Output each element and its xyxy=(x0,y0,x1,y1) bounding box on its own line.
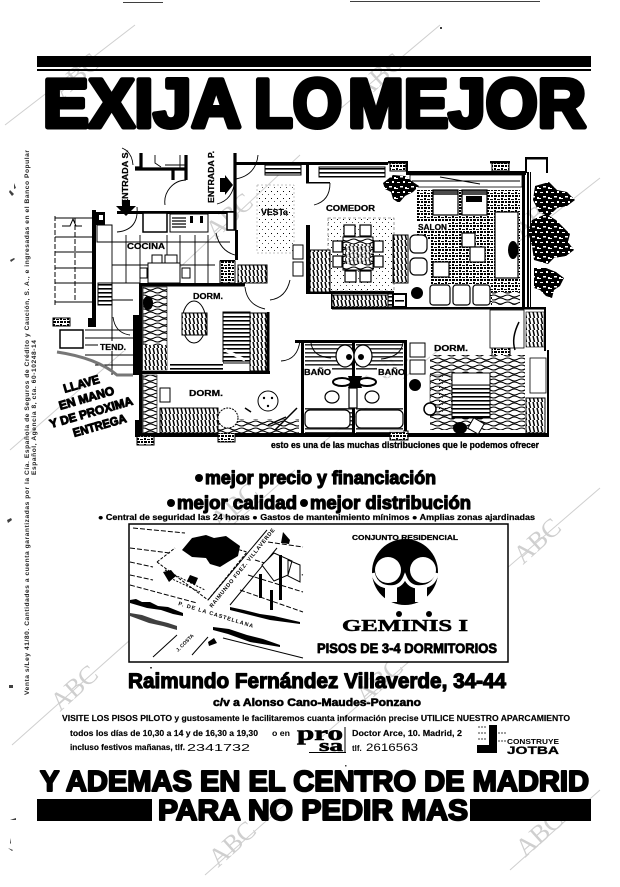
ABC watermarks: ABC xyxy=(507,187,566,244)
opening hours: incluso festivos mañanas, tlf. xyxy=(70,743,185,752)
prosa address xyxy=(352,728,462,754)
benefits heading: mejor distribución xyxy=(310,492,471,513)
windows and wall units xyxy=(53,163,522,445)
callout: llave en mano: EN MANO xyxy=(57,384,116,413)
legal text sidebar: Venta s/Ley 41/80. Cantidades a cuenta garantizadas por la Cía. Española de Seguros de Crédito y Caución, S. A., e ingresadas en el Banco Popular xyxy=(24,150,31,695)
ABC watermarks: ABC xyxy=(508,512,567,569)
bathrooms xyxy=(281,340,405,433)
entrance walls xyxy=(135,153,235,230)
label: COMEDOR: COMEDOR xyxy=(326,204,375,213)
name: Geminis I: GEMINIS I xyxy=(342,616,469,635)
logo: prosa: sa xyxy=(319,736,344,755)
panel: map and logo xyxy=(129,524,508,662)
label: DORM.: DORM. xyxy=(189,389,223,398)
benefits heading xyxy=(167,467,471,513)
exterior walls xyxy=(88,157,549,437)
stairs and kitchen area xyxy=(55,210,235,330)
ABC watermarks: ABC xyxy=(47,47,106,104)
location map: P. DE LA CASTELLANA xyxy=(177,601,254,630)
icon: Geminis logo xyxy=(372,539,438,605)
name: Geminis I xyxy=(342,611,469,635)
ABC watermarks: ABC xyxy=(350,652,409,709)
label: BAÑO right: BAÑO xyxy=(378,368,405,377)
opening hours: 2341732 xyxy=(187,742,250,754)
prosa address: Doctor Arce, 10. Madrid, 2 xyxy=(352,728,462,738)
title xyxy=(43,65,586,142)
title: EXIJA xyxy=(43,65,241,142)
location map xyxy=(130,528,303,658)
legal text sidebar: Español, Agencia 8, cta. 60-10248-14 xyxy=(31,340,38,475)
callout: llave en mano: ENTREGA xyxy=(71,411,128,440)
benefits heading: mejor calidad xyxy=(177,492,297,513)
ABC watermarks: ABC xyxy=(355,342,414,399)
callout: llave en mano: LLAVE xyxy=(62,372,101,396)
opening hours: todos los días de 10,30 a 14 y de 16,30 a 19,30 xyxy=(70,729,259,738)
caption: floor plan: esto es una de las muchas distribuciones que le podemos ofrecer xyxy=(271,440,539,451)
ABC watermarks: ABC xyxy=(350,47,409,104)
location map: J. COSTA xyxy=(175,633,196,653)
logo: prosa: pro xyxy=(297,723,343,745)
living room xyxy=(393,190,520,307)
entrance labels and arrows: ENTRADA P. xyxy=(207,151,216,203)
floor plan xyxy=(53,148,575,445)
label: TEND.: TEND. xyxy=(100,343,126,352)
label: VESTa: VESTa xyxy=(261,208,289,217)
laundry xyxy=(57,317,133,375)
benefits heading: mejor precio y financiación xyxy=(205,467,436,488)
right bedroom xyxy=(409,310,546,434)
legal text sidebar xyxy=(24,150,38,695)
prosa address: 2616563 xyxy=(366,742,418,754)
callout: llave en mano xyxy=(40,365,139,445)
label: SALON: SALON xyxy=(418,223,447,232)
label: DORM.: DORM. xyxy=(434,344,468,353)
vestibule xyxy=(236,155,330,300)
label: DORM.: DORM. xyxy=(193,292,223,301)
cross streets: c/v a Alonso Cano-Maudes-Ponzano xyxy=(213,697,421,709)
ABC watermarks: ABC xyxy=(203,815,262,872)
logo: prosa xyxy=(297,723,346,755)
bottom bars and tagline xyxy=(37,795,591,827)
ABC watermarks: ABC xyxy=(200,187,259,244)
subheading: pisos: PISOS DE 3-4 DORMITORIOS xyxy=(317,640,497,656)
ABC watermarks: ABC xyxy=(205,477,264,534)
logo: Jotba: CONSTRUYE xyxy=(507,737,559,746)
callout: llave en mano: Y DE PROXIMA xyxy=(48,394,135,431)
logo: Jotba: JOTBA xyxy=(507,745,559,757)
entrance labels and arrows: ENTRADA S. xyxy=(121,150,130,205)
header bar xyxy=(37,56,591,71)
location map: RAIMUNDO FDEZ. VILLAVERDE xyxy=(209,528,277,609)
dining room xyxy=(310,204,394,292)
lower bedroom xyxy=(143,375,299,433)
bottom headline: Y ADEMAS EN EL CENTRO DE MADRID xyxy=(40,766,589,798)
opening hours: o en xyxy=(272,729,290,738)
left bedroom xyxy=(143,287,267,371)
title: LO xyxy=(254,65,342,142)
bottom bars and tagline: PARA NO PEDIR MAS xyxy=(158,795,468,827)
entrance labels and arrows xyxy=(116,150,233,216)
ABC watermarks: ABC xyxy=(510,805,569,862)
title: MEJOR xyxy=(348,65,586,142)
plants xyxy=(383,175,575,298)
logo: Jotba xyxy=(477,725,559,757)
label: COCINA: COCINA xyxy=(127,242,165,251)
label: BAÑO left: BAÑO xyxy=(304,368,331,377)
address: Raimundo Fernández Villaverde, 34-44 xyxy=(128,669,506,693)
prosa address: tlf. xyxy=(352,744,362,753)
visit line: VISITE LOS PISOS PILOTO y gustosamente le facilitaremos cuanta información precise UTILICE NUESTRO APARCAMIENTO xyxy=(62,714,570,723)
features line: ● Central de seguridad las 24 horas ● Gastos de mantenimiento mínimos ● Amplias zonas ajardinadas xyxy=(98,513,536,522)
ABC watermarks: ABC xyxy=(45,659,104,716)
residential name: CONJUNTO RESIDENCIAL xyxy=(352,533,458,542)
opening hours xyxy=(70,729,290,754)
